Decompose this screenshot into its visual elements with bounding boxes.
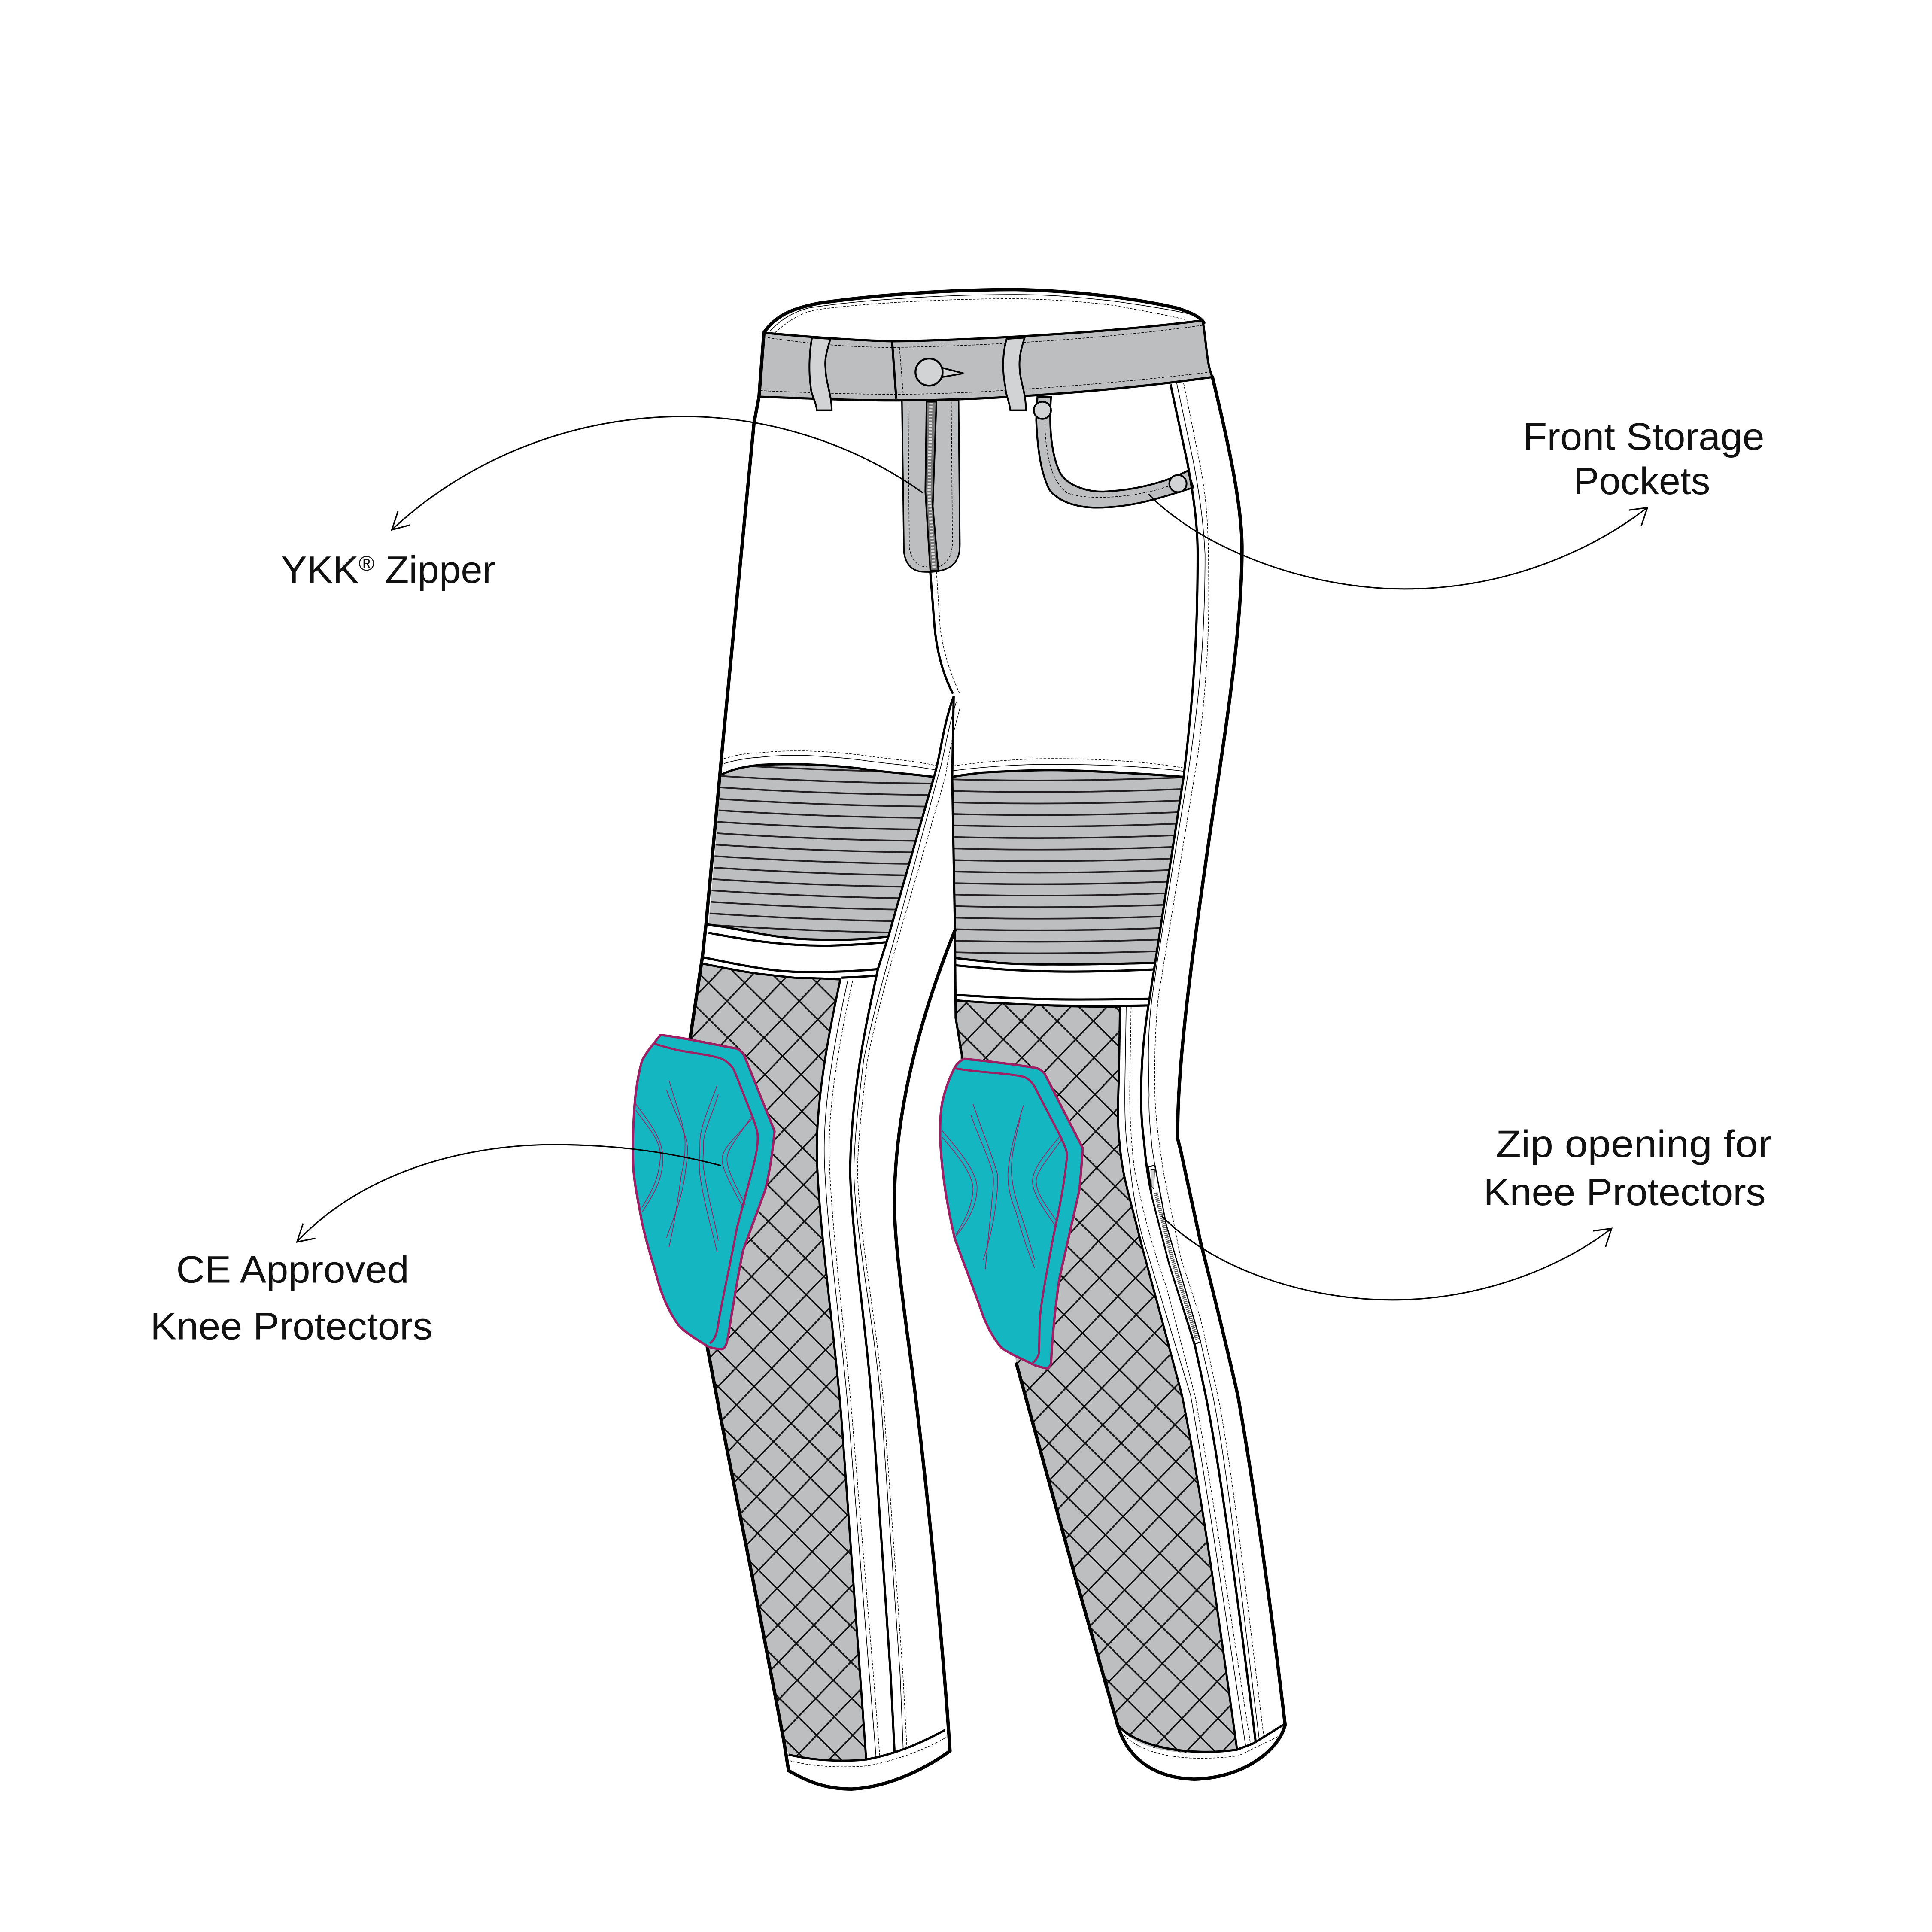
mesh panel left xyxy=(692,963,867,1762)
front pocket xyxy=(1034,397,1193,507)
mesh panel right xyxy=(957,999,1238,1753)
waistband xyxy=(759,320,1212,410)
label: front storage pockets: Front Storage xyxy=(1523,415,1765,458)
button xyxy=(915,358,963,386)
hem left xyxy=(789,1730,950,1789)
label: zip opening for knee protectors xyxy=(1483,1122,1772,1213)
callout: front pockets arrow xyxy=(1148,494,1647,589)
callout: zip opening arrow xyxy=(1162,1216,1612,1300)
waist rim xyxy=(764,289,1204,333)
label: zip opening for knee protectors: Knee Protectors xyxy=(1483,1170,1766,1213)
side stripe right leg xyxy=(1125,383,1264,1746)
label: front storage pockets xyxy=(1523,415,1765,502)
fly with zipper xyxy=(902,401,960,572)
trousers illustration xyxy=(689,288,1287,1791)
label: YKK zipper: ® xyxy=(358,552,374,575)
label: zip opening for knee protectors: Zip opening for xyxy=(1496,1122,1772,1165)
knee bands xyxy=(704,933,1153,1006)
label: YKK zipper: Zipper xyxy=(374,548,495,591)
seams above ribbed panels xyxy=(724,751,1184,771)
hem right xyxy=(1118,1724,1285,1779)
callout: YKK zipper arrow xyxy=(392,416,923,530)
belt loop left xyxy=(809,337,832,410)
label: CE approved knee protectors xyxy=(150,1248,432,1348)
knee protector right xyxy=(940,1059,1083,1369)
ribbed panel right xyxy=(942,770,1195,964)
knee protector left xyxy=(633,1035,775,1349)
crotch seam xyxy=(930,572,960,694)
outer outlines xyxy=(689,333,1285,1771)
label: YKK zipper: YKK xyxy=(281,548,357,591)
pocket rivet top xyxy=(1034,402,1051,419)
side zip opening xyxy=(1148,1165,1200,1344)
callout: knee protectors arrow xyxy=(297,1145,721,1242)
label: CE approved knee protectors: CE Approved xyxy=(176,1248,409,1291)
pocket rivet side xyxy=(1170,475,1187,492)
label: CE approved knee protectors: Knee Protectors xyxy=(150,1305,432,1348)
silhouette fill xyxy=(689,289,1285,1789)
ribbed panel left xyxy=(702,763,949,940)
label: front storage pockets: Pockets xyxy=(1574,459,1710,502)
side stripe left leg xyxy=(824,696,960,1757)
belt loop right xyxy=(1003,337,1026,410)
